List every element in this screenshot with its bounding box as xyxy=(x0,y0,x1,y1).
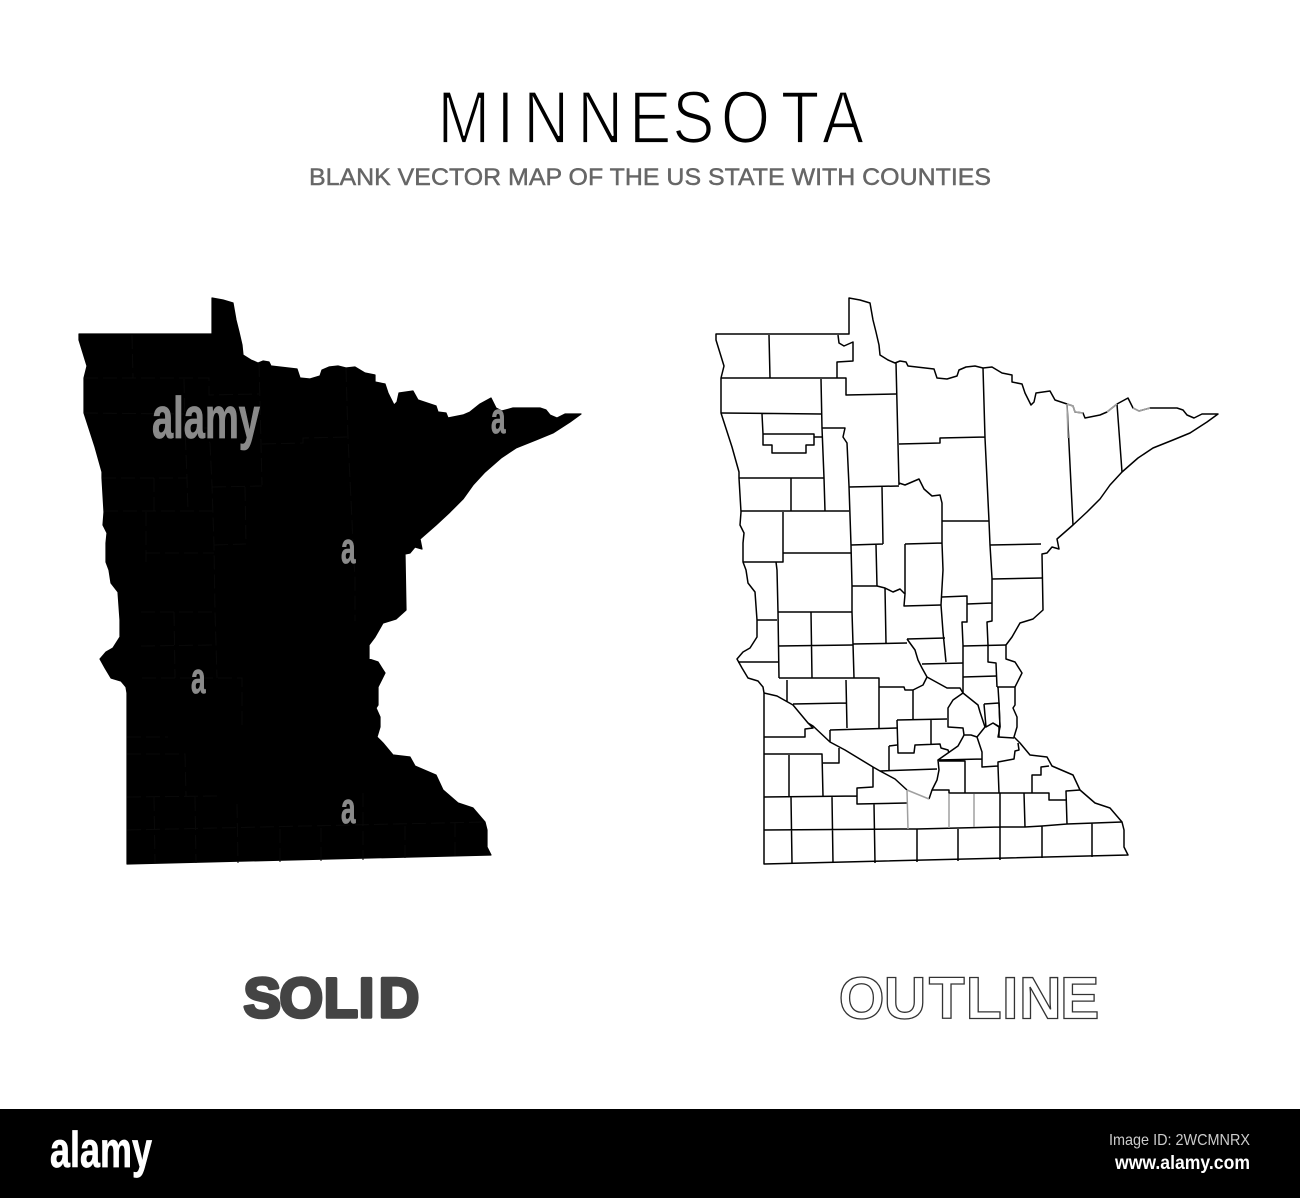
state border xyxy=(716,298,1218,864)
watermark letter: a xyxy=(341,784,356,833)
image id: Image ID: 2WCMNRX xyxy=(1109,1132,1250,1149)
watermark word: alamy xyxy=(152,386,260,451)
website: www.alamy.com xyxy=(1114,1153,1250,1174)
solid state silhouette xyxy=(79,298,581,864)
county lines central xyxy=(738,586,1015,753)
footer logo: alamy xyxy=(50,1122,152,1178)
watermark on solid map xyxy=(152,386,506,833)
watermark letter: a xyxy=(191,654,206,703)
outline map xyxy=(716,298,1218,864)
county lines metro xyxy=(830,693,1019,793)
faint county lines xyxy=(84,335,485,863)
outline label: OUTLINE xyxy=(839,966,1099,1032)
watermark letter: a xyxy=(491,394,506,443)
solid map xyxy=(79,298,581,864)
subtitle: BLANK VECTOR MAP OF THE US STATE WITH COUNTIES xyxy=(309,164,991,191)
county lines south xyxy=(764,723,1122,863)
Minnesota river xyxy=(764,693,939,799)
solid label: SOLID xyxy=(244,966,419,1029)
footer bar xyxy=(0,1109,1300,1198)
title: MINNESOTA xyxy=(438,76,864,159)
county lines north xyxy=(721,335,1122,693)
gray faded lines xyxy=(907,404,1150,829)
watermark letter: a xyxy=(341,524,356,573)
